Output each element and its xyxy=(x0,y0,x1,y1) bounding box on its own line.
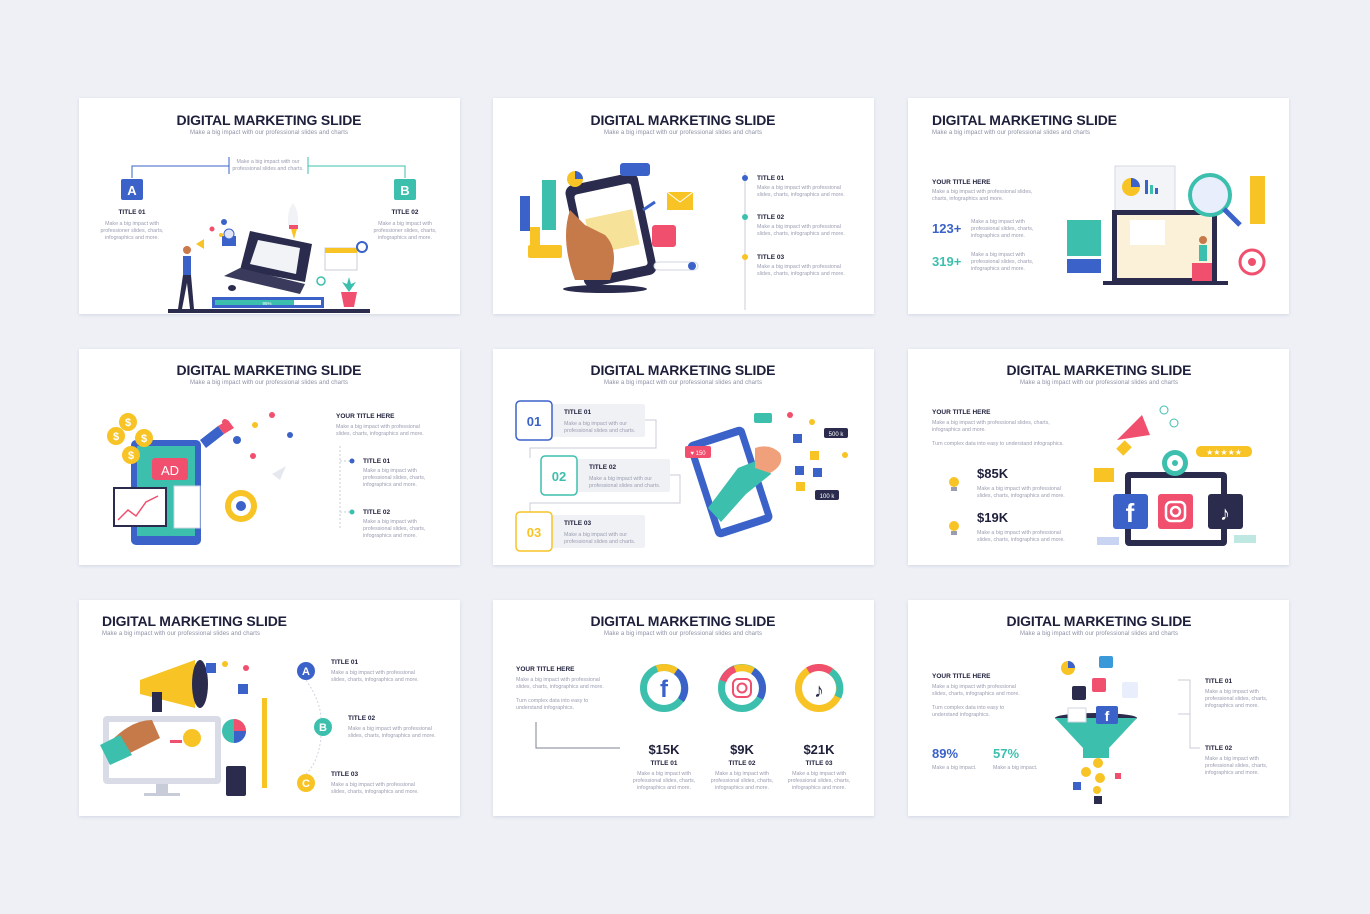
step 01: 01 xyxy=(527,414,541,429)
stat $9K xyxy=(711,742,773,791)
stat 57%: Make a big impact. xyxy=(993,765,1037,771)
stat $15K: Make a big impact with xyxy=(637,771,691,777)
dotted timeline: professional slides, charts, xyxy=(363,475,425,481)
item B: Make a big impact with professional xyxy=(348,726,432,732)
dotted timeline xyxy=(340,446,425,539)
step 01: professional slides and charts. xyxy=(564,428,635,434)
stat 123+: professional slides, charts, xyxy=(971,226,1033,232)
illustration: laptop with social icons: ♪ xyxy=(1220,503,1230,525)
card 6 title: DIGITAL MARKETING SLIDE xyxy=(1006,362,1192,378)
text block: Turn complex data into easy to understand infographics. xyxy=(932,441,1064,447)
item C xyxy=(297,771,419,795)
text block: Make a big impact with professional slides, charts, xyxy=(932,420,1050,426)
timeline: Make a big impact with professional xyxy=(757,224,841,230)
donut: facebook xyxy=(644,667,685,708)
connector text: Make a big impact with our xyxy=(236,159,300,165)
stat 89% xyxy=(932,746,976,771)
stat $9K: $9K xyxy=(730,742,755,757)
title 01 block: Make a big impact with xyxy=(1205,689,1259,695)
illustration: hand through phone xyxy=(685,412,848,539)
title 01 block: professional slides, charts, xyxy=(1205,696,1267,702)
stat $85K: $85K xyxy=(977,466,1009,481)
card 3: stats with analytics xyxy=(908,98,1289,314)
card 6: social revenue xyxy=(908,349,1289,565)
timeline: slides, charts, infographics and more. xyxy=(757,231,845,237)
text block: Make a big impact with professional xyxy=(932,684,1016,690)
item B: B xyxy=(319,722,327,734)
illustration: tablet with AD and magnet xyxy=(107,412,293,545)
card 7 subtitle: Make a big impact with our professional slides and charts xyxy=(102,631,260,637)
stat $19K: slides, charts, infographics and more. xyxy=(977,537,1065,543)
stat 57% xyxy=(993,746,1037,771)
card 4 subtitle: Make a big impact with our professional slides and charts xyxy=(190,380,348,386)
badge B: B xyxy=(400,183,410,198)
step 03: TITLE 03 xyxy=(564,520,591,527)
stat $19K: $19K xyxy=(977,510,1009,525)
illustration: tablet with AD and magnet: $ xyxy=(125,417,131,429)
illustration: hand through phone: 100 k xyxy=(820,494,835,500)
text block: Turn complex data into easy to xyxy=(932,705,1004,711)
timeline: Make a big impact with professional xyxy=(757,264,841,270)
illustration: laptop with rocket xyxy=(168,203,370,313)
card 3 title: DIGITAL MARKETING SLIDE xyxy=(932,112,1117,128)
text block: Turn complex data into easy to xyxy=(516,698,588,704)
timeline: slides, charts, infographics and more. xyxy=(757,192,845,198)
title 01 block: TITLE 01 xyxy=(118,209,146,216)
title 02 block: infographics and more. xyxy=(378,235,432,241)
connectors xyxy=(530,420,680,512)
step 02: professional slides and charts. xyxy=(589,483,660,489)
text block: Make a big impact with professional xyxy=(516,677,600,683)
dotted timeline: Make a big impact with xyxy=(363,468,417,474)
text block: YOUR TITLE HERE xyxy=(932,409,991,416)
card 6 subtitle: Make a big impact with our professional slides and charts xyxy=(1020,380,1178,386)
text block xyxy=(932,673,1020,718)
item C: slides, charts, infographics and more. xyxy=(331,789,419,795)
stat 319+: professional slides, charts, xyxy=(971,259,1033,265)
text block: YOUR TITLE HERE xyxy=(932,673,991,680)
card 1: A/B comparison: professional slides and charts. xyxy=(232,166,304,172)
card 7 title: DIGITAL MARKETING SLIDE xyxy=(102,613,287,629)
card 2 title: DIGITAL MARKETING SLIDE xyxy=(590,112,776,128)
title 02 block: TITLE 02 xyxy=(1205,745,1232,752)
stat $15K: $15K xyxy=(648,742,680,757)
card 8: social donuts xyxy=(493,600,874,816)
illustration: laptop with social icons xyxy=(1094,406,1256,546)
stat 57%: 57% xyxy=(993,746,1019,761)
title 02 block xyxy=(1205,745,1267,776)
bracket xyxy=(1178,680,1200,748)
illustration: laptop with social icons: ★★★★★ xyxy=(1206,448,1242,457)
dotted timeline: infographics and more. xyxy=(363,533,417,539)
stat 123+: infographics and more. xyxy=(971,233,1025,239)
illustration: tablet with AD and magnet: $ xyxy=(113,431,119,443)
stat $9K: professional slides, charts, xyxy=(711,778,773,784)
title 02 block: infographics and more. xyxy=(1205,770,1259,776)
illustration: funnel: f xyxy=(1105,708,1110,724)
card 9 title: DIGITAL MARKETING SLIDE xyxy=(1006,613,1192,629)
card 1 subtitle: Make a big impact with our professional slides and charts xyxy=(190,130,348,136)
text block xyxy=(516,666,604,711)
card 1: A/B comparison xyxy=(79,98,460,314)
step 03: 03 xyxy=(527,525,541,540)
step 03: professional slides and charts. xyxy=(564,539,635,545)
text block: slides, charts, infographics and more. xyxy=(336,431,424,437)
card 2 subtitle: Make a big impact with our professional slides and charts xyxy=(604,130,762,136)
title 01 block: professioner slides, charts, xyxy=(100,228,164,234)
text block: understand infographics. xyxy=(516,705,574,711)
illustration: laptop with rocket: 95% xyxy=(262,301,272,306)
card 8 title: DIGITAL MARKETING SLIDE xyxy=(590,613,776,629)
stat 89%: Make a big impact. xyxy=(932,765,976,771)
step 01 xyxy=(516,401,645,440)
card 9 subtitle: Make a big impact with our professional slides and charts xyxy=(1020,631,1178,637)
illustration: tablet with AD and magnet: $ xyxy=(141,433,147,445)
stat $15K xyxy=(633,742,695,791)
step 02 xyxy=(541,456,670,495)
illustration: tablet with AD and magnet: AD xyxy=(161,463,179,478)
card 4: ad magnet xyxy=(79,349,460,565)
stat $9K: infographics and more. xyxy=(715,785,769,791)
title 02 block: Make a big impact with xyxy=(1205,756,1259,762)
stat $15K: professional slides, charts, xyxy=(633,778,695,784)
card 9: funnel xyxy=(908,600,1289,816)
step 02: 02 xyxy=(552,469,566,484)
stat $21K xyxy=(788,742,850,791)
step 01: Make a big impact with our xyxy=(564,421,627,427)
badge A xyxy=(121,179,143,200)
stat 89%: 89% xyxy=(932,746,958,761)
title 02 block: Make a big impact with xyxy=(378,221,432,227)
connector top xyxy=(132,157,405,178)
donut: tiktok xyxy=(798,667,840,708)
stat 319+: Make a big impact with xyxy=(971,252,1025,258)
card 3 subtitle: Make a big impact with our professional slides and charts xyxy=(932,130,1090,136)
illustration: monitor with megaphone xyxy=(100,660,267,796)
stat 319+: 319+ xyxy=(932,254,962,269)
item A: A xyxy=(302,666,310,678)
title 01 block: infographics and more. xyxy=(105,235,159,241)
text block: slides, charts, infographics and more. xyxy=(516,684,604,690)
title 02 block: TITLE 02 xyxy=(391,209,419,216)
illustration: funnel xyxy=(1055,656,1138,804)
stat $21K: Make a big impact with xyxy=(792,771,846,777)
dotted timeline: TITLE 02 xyxy=(363,509,390,516)
card 5: numbered steps xyxy=(493,349,874,565)
stat $21K: professional slides, charts, xyxy=(788,778,850,784)
text block: infographics and more. xyxy=(932,427,986,433)
dotted timeline: TITLE 01 xyxy=(363,458,390,465)
badge A: A xyxy=(127,183,137,198)
item C: Make a big impact with professional xyxy=(331,782,415,788)
card 5 subtitle: Make a big impact with our professional slides and charts xyxy=(604,380,762,386)
card 1 title: DIGITAL MARKETING SLIDE xyxy=(176,112,362,128)
donut: instagram xyxy=(722,668,762,708)
card 4 title: DIGITAL MARKETING SLIDE xyxy=(176,362,362,378)
badge B xyxy=(394,179,416,200)
stat $9K: TITLE 02 xyxy=(728,760,756,767)
illustration: laptop with social icons: f xyxy=(1126,498,1135,528)
stat $21K: infographics and more. xyxy=(792,785,846,791)
illustration: hand through phone: ♥ 150 xyxy=(690,451,706,457)
text block xyxy=(932,179,1032,202)
timeline: TITLE 03 xyxy=(757,254,784,261)
stat $85K: Make a big impact with professional xyxy=(977,486,1061,492)
card 7: megaphone ABC xyxy=(79,600,460,816)
stat $21K: $21K xyxy=(803,742,835,757)
text block: understand infographics. xyxy=(932,712,990,718)
item A: slides, charts, infographics and more. xyxy=(331,677,419,683)
item C: C xyxy=(302,778,310,790)
donut: tiktok: ♪ xyxy=(814,680,824,702)
donut: facebook: f xyxy=(660,676,669,703)
title 02 block xyxy=(373,209,437,241)
item A xyxy=(297,659,419,683)
text block: YOUR TITLE HERE xyxy=(932,179,991,186)
step 02: TITLE 02 xyxy=(589,464,616,471)
item A: Make a big impact with professional xyxy=(331,670,415,676)
text block: Make a big impact with professional xyxy=(336,424,420,430)
stat 123+: Make a big impact with xyxy=(971,219,1025,225)
illustration: report and magnifier xyxy=(1067,166,1265,285)
stat $21K: TITLE 03 xyxy=(805,760,833,767)
title 01 block: infographics and more. xyxy=(1205,703,1259,709)
stat $15K: TITLE 01 xyxy=(650,760,678,767)
dotted timeline: professional slides, charts, xyxy=(363,526,425,532)
stat $15K: infographics and more. xyxy=(637,785,691,791)
card 2: phone timeline xyxy=(493,98,874,314)
stat 123+: 123+ xyxy=(932,221,962,236)
timeline: TITLE 01 xyxy=(757,175,784,182)
stat $19K xyxy=(949,510,1065,543)
dotted timeline: infographics and more. xyxy=(363,482,417,488)
illustration: tablet with AD and magnet: $ xyxy=(128,450,134,462)
stat $9K: Make a big impact with xyxy=(715,771,769,777)
text block: YOUR TITLE HERE xyxy=(336,413,395,420)
timeline: TITLE 02 xyxy=(757,214,784,221)
timeline xyxy=(742,172,845,310)
text block: Make a big impact with professional slides, xyxy=(932,189,1032,195)
step 03: Make a big impact with our xyxy=(564,532,627,538)
item B: slides, charts, infographics and more. xyxy=(348,733,436,739)
stat $85K xyxy=(949,466,1065,499)
item B: TITLE 02 xyxy=(348,715,375,722)
bracket line xyxy=(536,722,620,748)
title 02 block: professioner slides, charts, xyxy=(373,228,437,234)
text block: charts, infographics and more. xyxy=(932,196,1003,202)
illustration: hand through phone: 500 k xyxy=(829,432,844,438)
step 03 xyxy=(516,512,645,551)
stat 319+ xyxy=(932,252,1033,272)
text block xyxy=(932,409,1064,447)
item A: TITLE 01 xyxy=(331,659,358,666)
card 5 title: DIGITAL MARKETING SLIDE xyxy=(590,362,776,378)
title 01 block xyxy=(100,209,164,241)
timeline: slides, charts, infographics and more. xyxy=(757,271,845,277)
dotted timeline: Make a big impact with xyxy=(363,519,417,525)
step 01: TITLE 01 xyxy=(564,409,591,416)
title 01 block xyxy=(1205,678,1267,709)
step 02: Make a big impact with our xyxy=(589,476,652,482)
item C: TITLE 03 xyxy=(331,771,358,778)
title 01 block: TITLE 01 xyxy=(1205,678,1232,685)
title 01 block: Make a big impact with xyxy=(105,221,159,227)
timeline: Make a big impact with professional xyxy=(757,185,841,191)
text block: YOUR TITLE HERE xyxy=(516,666,575,673)
illustration: hand with phone xyxy=(520,163,698,293)
stat $85K: slides, charts, infographics and more. xyxy=(977,493,1065,499)
title 02 block: professional slides, charts, xyxy=(1205,763,1267,769)
stat 123+ xyxy=(932,219,1033,239)
text block xyxy=(336,413,424,437)
item B xyxy=(314,715,436,739)
card 8 subtitle: Make a big impact with our professional slides and charts xyxy=(604,631,762,637)
stat $19K: Make a big impact with professional xyxy=(977,530,1061,536)
text block: slides, charts, infographics and more. xyxy=(932,691,1020,697)
stat 319+: infographics and more. xyxy=(971,266,1025,272)
